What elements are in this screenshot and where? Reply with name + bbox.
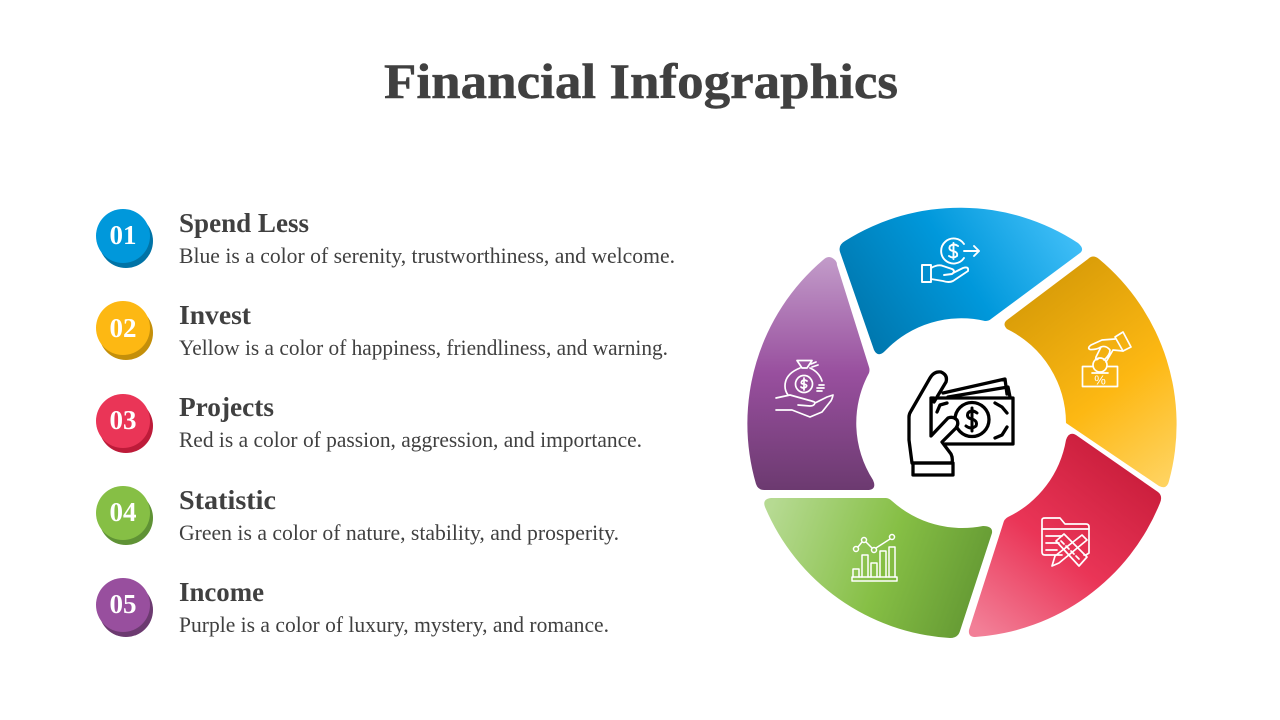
heading: Invest: Invest <box>179 300 251 330</box>
number badge 05: 05 <box>110 589 136 619</box>
list item 2: Invest <box>96 300 668 360</box>
number badge 04 <box>96 486 153 545</box>
heading: Statistic: Statistic <box>179 485 276 515</box>
number badge 01 <box>96 209 153 268</box>
segment: purple <box>747 257 874 490</box>
title: Financial Infographics <box>384 53 898 109</box>
number badge 04: 04 <box>110 497 136 527</box>
number badge 02: 02 <box>110 313 136 343</box>
list item 4: Statistic <box>96 485 619 545</box>
list item 1: Spend Less <box>96 208 675 268</box>
number badge 03 <box>96 394 153 453</box>
number badge 05 <box>96 578 153 637</box>
number badge 01: 01 <box>110 220 136 250</box>
description: blue: Blue is a color of serenity, trustworthiness, and welcome. <box>179 243 675 268</box>
icon: central hand holding banknotes <box>909 372 1013 475</box>
icon: ruler, pencil and folder <box>1042 518 1089 566</box>
number badge 02 <box>96 301 153 360</box>
icon: bar chart with trend line <box>852 534 897 581</box>
icon: hand dropping coin in box <box>1082 332 1131 388</box>
description: purple: Purple is a color of luxury, mystery, and romance. <box>179 612 609 637</box>
segment: red <box>969 434 1161 637</box>
segment: yellow <box>1004 256 1177 487</box>
number badge 03: 03 <box>110 405 136 435</box>
donut chart <box>747 208 1177 638</box>
heading: Projects: Projects <box>179 392 274 422</box>
heading: Spend Less: Spend Less <box>179 208 309 238</box>
list item 5: Income <box>96 577 609 637</box>
description: red: Red is a color of passion, aggression, and importance. <box>179 427 642 452</box>
segment: green <box>764 498 992 638</box>
description: yellow: Yellow is a color of happiness, friendliness, and warning. <box>179 335 668 360</box>
list item 3: Projects <box>96 392 642 453</box>
segment: blue <box>840 208 1082 354</box>
icon: money bag over hand <box>776 360 833 417</box>
icon: hand with outgoing coin <box>922 238 979 282</box>
description: green: Green is a color of nature, stability, and prosperity. <box>179 520 619 545</box>
hand <box>909 372 958 463</box>
icon: hand dropping coin in box: % <box>1094 372 1106 388</box>
heading: Income: Income <box>179 577 264 607</box>
